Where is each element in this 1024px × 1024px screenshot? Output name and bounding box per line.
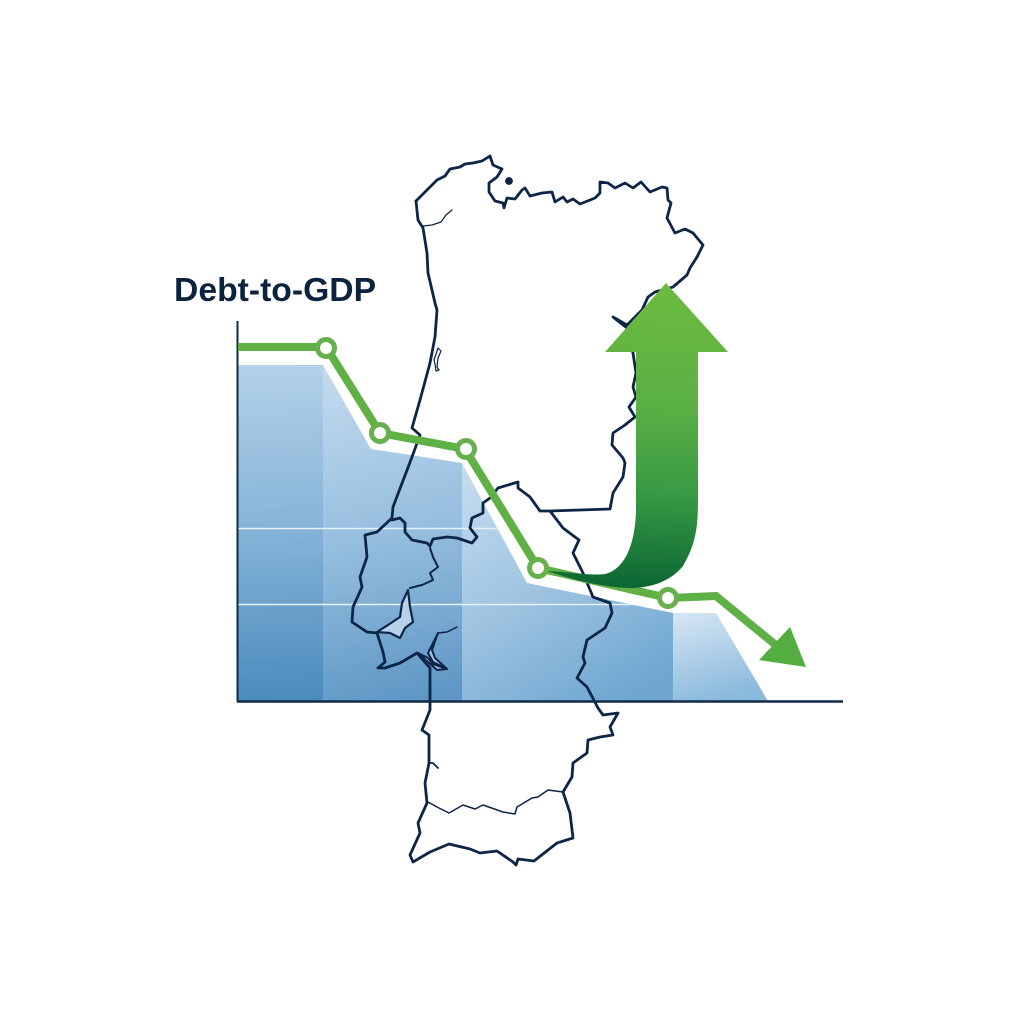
- map: southern border: [428, 790, 563, 814]
- map: upper river: [423, 210, 452, 226]
- trend arrowhead: [759, 627, 806, 667]
- data point markers: [318, 340, 676, 606]
- map: central river: [410, 548, 438, 588]
- map: west coast: [352, 201, 618, 865]
- infographic canvas: [176, 154, 843, 866]
- map of Portugal outline: [352, 156, 703, 865]
- green debt trend line: [238, 347, 777, 646]
- heading: Debt-to-GDP: Debt-to-GDP: [174, 271, 376, 309]
- axes: [237, 321, 843, 702]
- map: Tagus estuary: [377, 590, 413, 638]
- large upward recovery arrow: [547, 283, 728, 588]
- map: southern estuary: [418, 633, 447, 670]
- map: small islands: [434, 348, 441, 371]
- area chart: debt columns: [237, 360, 773, 702]
- map: southern estuary channel: [438, 627, 457, 633]
- map: northern coast and border: [392, 156, 703, 546]
